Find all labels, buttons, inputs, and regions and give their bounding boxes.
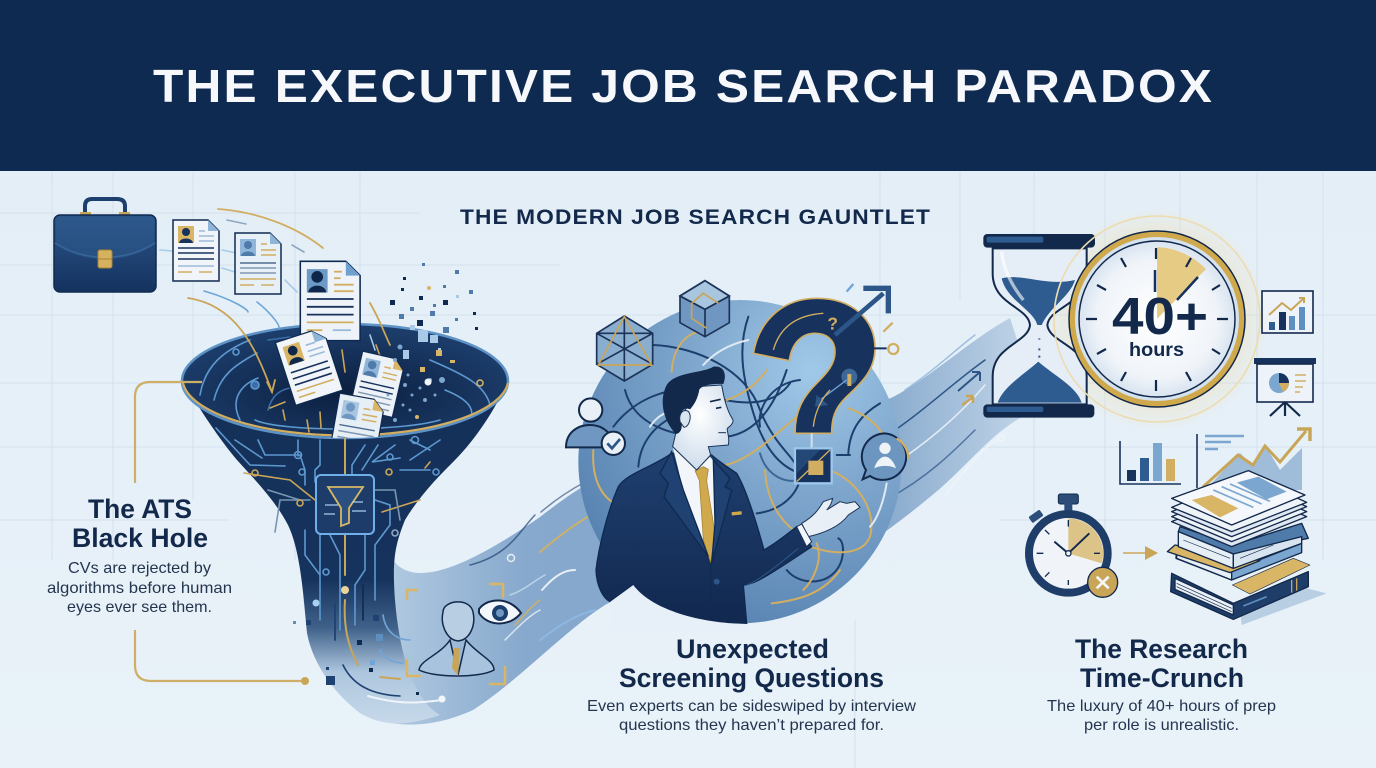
subheading: THE MODERN JOB SEARCH GAUNTLET [460,206,931,229]
icon: small growth chart [1262,291,1313,333]
icon: CV 6 falling [331,392,384,438]
research time-crunch caption [1047,634,1276,734]
third book [1176,543,1302,580]
funnel body [183,381,508,723]
gold diamond chip [795,448,832,483]
falling sparks and arcs [160,209,390,392]
panel: unexpected questions illustration [566,281,908,632]
ATS description: CVs are rejected by [68,560,211,577]
paper stack [1172,490,1307,547]
second book [1178,523,1308,554]
lower sand [998,362,1082,403]
gold folder [1167,545,1260,573]
icon: CV 5 falling [350,351,405,417]
icon: presentation board [1254,358,1316,416]
icon: CV 1 [173,220,219,281]
icon: briefcase [54,199,156,292]
funnel: ATS black hole [182,324,508,723]
ATS description [47,560,232,616]
circuit traces [216,428,440,630]
ATS heading: Black Hole [72,523,208,553]
icon: stack of books and papers [1167,471,1327,625]
hair [663,366,725,434]
screening heading: Unexpected [676,634,829,664]
ticks [1086,248,1228,391]
flowing ribbon [303,318,1040,725]
ATS heading: The ATS [88,494,192,524]
icon: wireframe polyhedron [597,316,653,381]
tangled lines [593,317,887,603]
research heading: Time-Crunch [1080,663,1244,693]
lapels [660,452,708,557]
shirt collar [673,447,727,560]
header band [0,0,1376,171]
suit [596,453,812,623]
light wedge under figure [610,585,747,632]
screening description [587,698,916,734]
icon: person with check [566,398,625,455]
elapsed wedge [1157,247,1206,319]
icon: hourglass [983,234,1095,418]
clock hands [1155,270,1198,300]
data fade [312,585,446,703]
bottom book [1171,572,1308,619]
screening heading [619,634,884,693]
screening questions caption [587,634,916,734]
title: THE EXECUTIVE JOB SEARCH PARADOX [153,60,1214,112]
blue circle backdrop [578,300,902,623]
icon: speech bubble person [862,433,908,480]
clock: 40+ hours [1054,216,1260,422]
funnel rim [182,324,508,438]
arrow to stack [1123,546,1158,560]
question mark: ? [827,313,838,333]
icon: CV 3 [300,261,360,341]
glass [993,248,1087,404]
bowl rings [200,335,490,432]
hand [802,498,860,537]
gold sheet [1232,558,1310,594]
ATS description: algorithms before human [47,580,232,597]
40+ figure: 40+ [1112,288,1208,346]
ATS connector line [135,382,309,685]
screening heading: Screening Questions [619,663,884,693]
businessman figure [596,366,860,623]
screening description: questions they haven’t prepared for. [619,717,884,734]
icon: stopwatch with cross [1028,494,1118,597]
research description: The luxury of 40+ hours of prep [1047,698,1276,715]
clock glow [1045,207,1269,431]
research heading [1075,634,1248,693]
ATS description: eyes ever see them. [67,599,212,616]
research description [1047,698,1276,734]
icon: human reviewer with eye [407,584,521,684]
AI filter chip [316,475,374,534]
question mark [753,284,898,448]
research description: per role is unrealistic. [1084,717,1239,734]
gold rim arc [183,383,508,436]
screening description: Even experts can be sideswiped by interview [587,698,916,715]
icon: CV 4 falling [275,327,343,405]
shadow [1240,588,1327,625]
clock face [1072,234,1242,404]
icon: rising trend chart [1197,429,1310,490]
icon: bar chart [1120,441,1181,484]
hours label: hours [1129,340,1184,361]
tie [695,467,715,563]
upper sand [1002,277,1075,325]
data particles dissolving [386,263,483,422]
research heading: The Research [1075,634,1248,664]
icon: cube [680,281,729,337]
ATS heading [72,494,208,553]
icon: CV 2 [235,233,281,294]
neck and face [673,385,733,470]
ear [680,411,690,427]
ATS caption [47,494,232,616]
caps [983,234,1095,248]
